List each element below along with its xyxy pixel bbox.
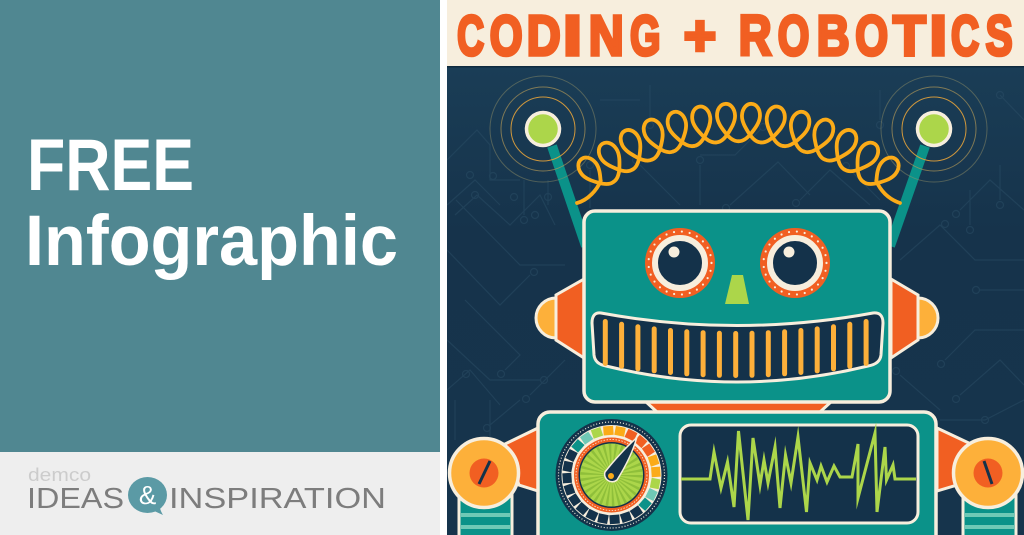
heading: FREE Infographic: FREE	[27, 125, 194, 206]
title: CODING + ROBOTICS: C	[457, 4, 484, 68]
logo: IDEAS word: IDEAS	[27, 483, 124, 515]
icon: spring coil between antennas	[574, 103, 903, 203]
panel: robot torso	[538, 412, 936, 535]
circuit-board pattern	[447, 85, 1024, 440]
heading: FREE Infographic	[25, 125, 398, 281]
panel: robot poster background	[447, 67, 1024, 535]
panel: oscilloscope screen	[680, 425, 918, 523]
title: CODING + ROBOTICS: I	[563, 4, 582, 68]
icon: left shoulder	[505, 428, 538, 491]
title: CODING + ROBOTICS: +	[684, 4, 716, 68]
icon: left arm	[459, 495, 512, 535]
title: CODING + ROBOTICS: O	[490, 4, 523, 68]
icon: right eye	[760, 228, 830, 298]
icon: grinning mouth	[592, 313, 883, 382]
icon: ampersand speech bubble	[128, 477, 167, 515]
title: CODING + ROBOTICS: O	[855, 4, 888, 68]
title: CODING + ROBOTICS: G	[630, 4, 660, 68]
title: CODING + ROBOTICS: I	[930, 4, 947, 68]
icon: left ear	[536, 279, 584, 358]
icon: dial needle	[605, 438, 637, 482]
panel: robot head	[584, 211, 890, 402]
title banner	[447, 0, 1024, 68]
logo: demco wordmark: demco	[28, 465, 91, 485]
title: CODING + ROBOTICS: N	[589, 4, 624, 68]
icon: right arm	[963, 495, 1016, 535]
chart: waveform	[681, 431, 916, 520]
icon: left antenna	[490, 76, 596, 246]
icon: ampersand speech bubble: &	[139, 480, 156, 510]
icon: right knob	[954, 438, 1022, 508]
panel: logo footer	[0, 452, 440, 535]
icon: right antenna	[881, 76, 987, 246]
title: CODING + ROBOTICS: R	[739, 4, 772, 68]
icon: neck	[645, 401, 832, 412]
panel: teal left block	[0, 0, 440, 452]
icon: left eye	[645, 228, 715, 298]
title: CODING + ROBOTICS: T	[893, 4, 926, 68]
icon: right shoulder	[937, 428, 971, 491]
title: CODING + ROBOTICS: O	[778, 4, 809, 68]
logo: INSPIRATION word: INSPIRATION	[169, 483, 386, 515]
title: CODING + ROBOTICS: S	[986, 4, 1013, 68]
icon: left knob	[450, 438, 518, 508]
title: CODING + ROBOTICS: D	[527, 4, 561, 68]
icon: right ear	[891, 279, 938, 358]
chart: speedometer dial	[556, 419, 668, 531]
heading: FREE Infographic: Infographic	[25, 202, 398, 281]
title: CODING + ROBOTICS: C	[951, 4, 979, 68]
title: CODING + ROBOTICS: B	[817, 4, 850, 68]
icon: nose	[725, 275, 749, 304]
divider: white gutter	[440, 0, 447, 535]
